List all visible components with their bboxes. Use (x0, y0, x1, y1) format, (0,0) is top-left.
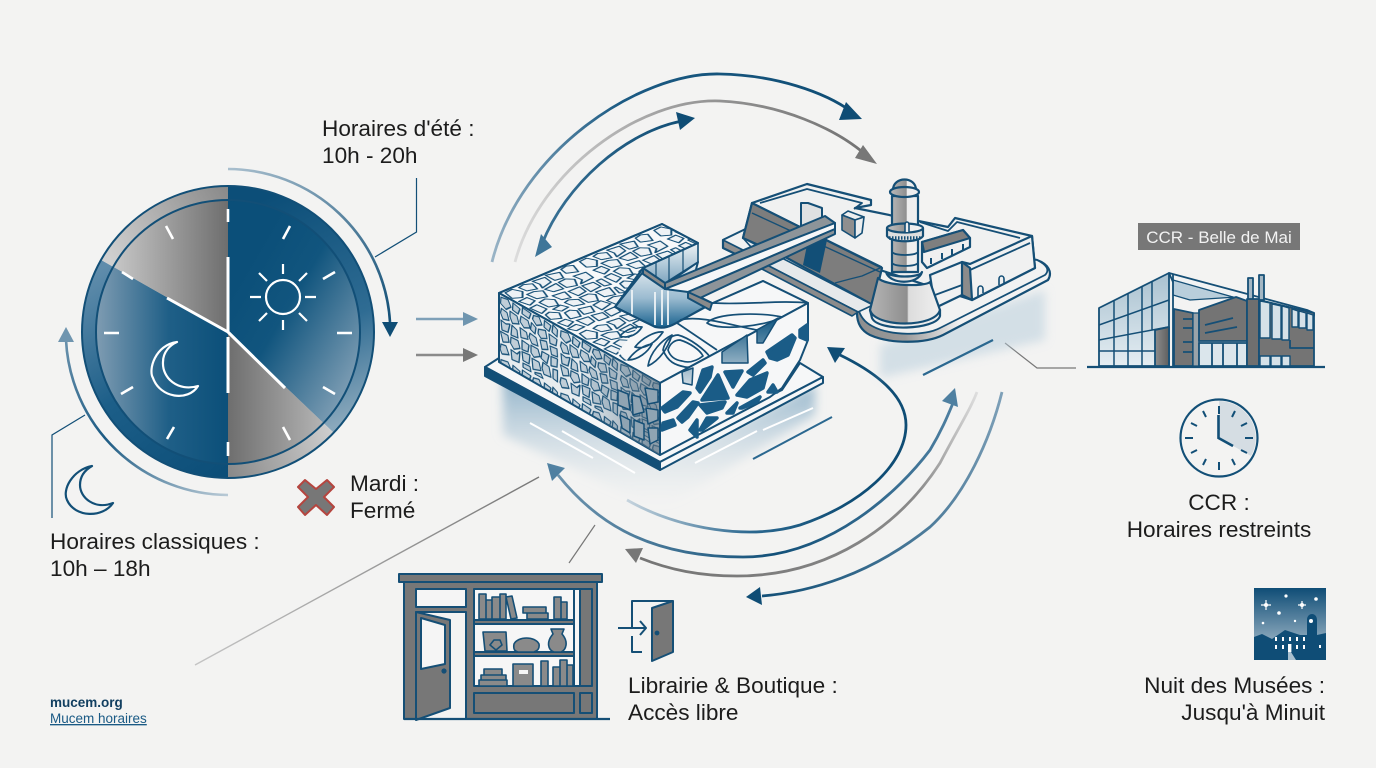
leader: summer hours (375, 178, 416, 257)
shelves opening (474, 589, 583, 686)
label: summer hours: Horaires d'été : (322, 116, 474, 141)
clock ticks and hands (104, 209, 352, 456)
grey volumes (1174, 309, 1193, 366)
bridge shadow on wall (803, 240, 827, 273)
label: bookshop: Librairie & Boutique : (628, 673, 838, 698)
icon: small clock (1180, 400, 1258, 476)
illustration: MuCEM building (485, 216, 835, 473)
badge: CCR (1138, 223, 1300, 250)
courtyard glass (615, 262, 712, 328)
illustration: Fort Saint-Jean (723, 180, 1050, 378)
leader: classic hours (52, 415, 85, 518)
streak: fort diagonal (923, 340, 993, 375)
fort glow (880, 290, 1045, 378)
fort wall ledge lines (752, 207, 882, 283)
fort small cube (842, 211, 864, 238)
label: classic hours: Horaires classiques : (50, 529, 260, 554)
lower shelf items (479, 660, 573, 686)
ground (1087, 366, 1325, 368)
fort base top surface (723, 226, 1047, 334)
fort long building (922, 230, 970, 268)
ground line (404, 718, 610, 720)
right wing (1259, 300, 1314, 366)
label: bookshop: Accès libre (628, 700, 738, 725)
label: summer hours: 10h - 20h (322, 143, 417, 168)
left face large cells (618, 388, 658, 444)
vases (483, 629, 566, 652)
arrow: summer arc around clock (228, 169, 398, 337)
fort courtyard top (743, 184, 1035, 300)
icon: moon (151, 342, 198, 396)
fort rampart inner line (760, 189, 1020, 238)
courtyard pillars (632, 290, 668, 325)
top face white right part (618, 281, 808, 383)
icon: night museum (1254, 588, 1326, 660)
label: classic hours: 10h – 18h (50, 556, 151, 581)
façade blobs (662, 325, 807, 437)
circular arrows: top (492, 74, 877, 262)
label: CCR hours: Horaires restreints (1127, 517, 1311, 542)
icon: door entrance (618, 601, 673, 661)
inner sectors (96, 200, 360, 464)
illustration: bookshop (399, 574, 610, 720)
glass wing (1099, 273, 1169, 366)
museum base plate (485, 358, 823, 462)
top face large cells (620, 302, 808, 367)
badge: CCR: CCR - Belle de Mai (1146, 228, 1292, 247)
fort front wall (930, 236, 1035, 308)
arrows from clock to museum (416, 312, 478, 362)
leader lines (195, 343, 1076, 665)
outer ring sectors (82, 186, 374, 478)
door (416, 612, 450, 720)
museum left face (499, 293, 660, 455)
label: museum night: Jusqu'à Minuit (1181, 700, 1326, 725)
source links: Mucem horaires (50, 711, 147, 726)
clock dial: opening hours (82, 186, 374, 478)
fort base platform (723, 226, 1050, 342)
fort lower strip (743, 238, 873, 312)
fort bastion (870, 278, 940, 324)
source links: mucem.org (50, 695, 123, 710)
façade shaded openings (682, 318, 778, 385)
streak: blue line (753, 417, 832, 459)
arrow: classic arc around clock (58, 327, 228, 495)
museum glow (503, 375, 815, 510)
light streaks (530, 408, 813, 473)
glass block mullions (656, 250, 683, 281)
icon: closed cross (298, 480, 334, 515)
museum right face (660, 303, 808, 455)
walkway bridge to fort (643, 216, 835, 310)
label: CCR hours: CCR : (1188, 490, 1250, 515)
books (479, 594, 567, 619)
label: museum night: Nuit des Musées : (1144, 673, 1325, 698)
icon: sun (250, 264, 316, 330)
museum top face (499, 224, 808, 383)
roof (1169, 273, 1314, 316)
chimneys (1248, 275, 1264, 300)
fort tower (886, 180, 923, 282)
shop frame (404, 582, 597, 719)
circular arrows: bottom (547, 347, 1002, 605)
illustration: CCR building (1087, 273, 1325, 367)
label: closed Tuesday: Fermé (350, 498, 415, 523)
icon: small moon (66, 466, 113, 514)
small square tower (801, 203, 822, 230)
back glass block (643, 243, 698, 283)
label: closed Tuesday: Mardi : (350, 471, 419, 496)
fort dark wall (743, 203, 882, 305)
source links (50, 695, 147, 726)
